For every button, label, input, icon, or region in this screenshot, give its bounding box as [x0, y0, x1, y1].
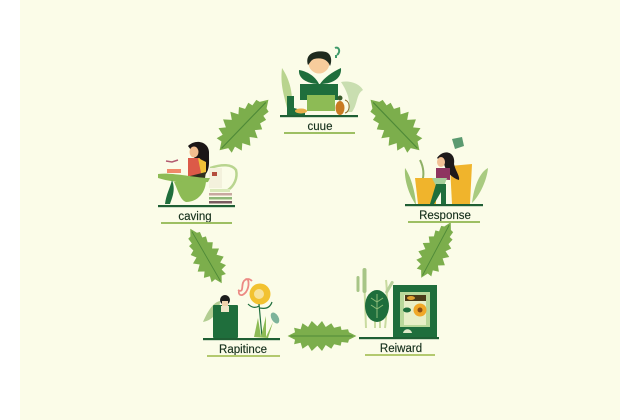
sunflower: [250, 284, 270, 304]
arrow leaf: reward to repetition: [288, 321, 356, 351]
book stack: [209, 168, 222, 188]
orange: [414, 304, 426, 316]
underline: reward: [365, 354, 435, 356]
collar: [221, 306, 229, 312]
grass: [254, 316, 273, 338]
underline: repetition: [207, 355, 280, 357]
question mark: [335, 48, 339, 58]
legs: [430, 184, 446, 204]
face: [437, 157, 445, 167]
underline: craving: [161, 222, 232, 224]
flower stem: [420, 160, 423, 182]
arrow leaf: craving to cue: [206, 87, 282, 163]
shoe: [295, 108, 307, 114]
hair: [188, 142, 209, 176]
label: cue: cuue: [308, 121, 332, 133]
arrow leaf: response to reward: [408, 215, 464, 285]
arrow leaf: cue to response: [357, 87, 433, 163]
cue illustration: [280, 48, 363, 117]
yellow chair: [415, 178, 436, 204]
underline: response: [408, 221, 480, 223]
stem plant: [165, 180, 174, 204]
plant left: [203, 301, 220, 322]
teapot: [336, 101, 344, 115]
image strip: [405, 295, 426, 301]
top: [436, 168, 450, 180]
craving illustration: [158, 142, 237, 207]
plant right: [341, 81, 363, 112]
reeds: [364, 274, 366, 328]
plant right: [472, 168, 488, 203]
skirt: [432, 178, 447, 186]
response illustration: [405, 137, 488, 206]
label: reward: Reiward: [380, 343, 422, 355]
ground line: [203, 338, 280, 340]
reward illustration: [356, 268, 439, 339]
small leaf: [403, 308, 411, 312]
underline: cue: [284, 132, 355, 134]
small leaf: [269, 311, 281, 325]
screen: [400, 292, 430, 327]
stem: [248, 302, 272, 337]
table top: [158, 174, 210, 183]
ground line: [359, 337, 439, 339]
label: repetition: Rapitince: [219, 344, 267, 356]
head: [308, 52, 330, 74]
person head: [220, 295, 230, 305]
tree: [374, 318, 376, 328]
pink loop: [238, 279, 252, 295]
plant left: [405, 168, 416, 205]
mailbox body: [213, 305, 238, 338]
face: [190, 146, 198, 158]
arrow leaf: repetition to craving: [177, 221, 235, 291]
plant left: [281, 68, 292, 112]
steam: [166, 160, 178, 162]
shawl: [198, 158, 206, 178]
desk: [307, 95, 335, 111]
ground line: [405, 204, 483, 206]
chair frame: [210, 165, 237, 190]
body: [300, 84, 338, 100]
person face: [222, 301, 228, 306]
legs: [287, 96, 305, 115]
ground line: [280, 115, 358, 117]
screen frame: [393, 285, 437, 338]
hair: [437, 152, 459, 180]
plate: [167, 169, 181, 173]
label: craving: caving: [178, 211, 212, 223]
watering can: [452, 137, 464, 149]
top: [188, 158, 204, 178]
dial: [403, 329, 412, 333]
repetition illustration: [203, 279, 281, 340]
collar leaves: [299, 70, 319, 84]
label: response: Response: [419, 210, 471, 222]
ground line: [158, 205, 235, 207]
bowl seat: [174, 180, 206, 202]
skirt: [190, 172, 206, 180]
